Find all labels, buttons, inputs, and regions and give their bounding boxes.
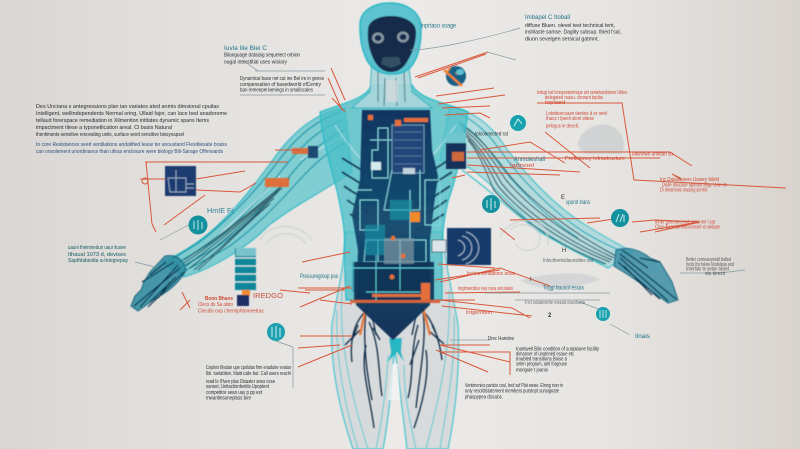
text block: red lower left callout	[198, 296, 264, 314]
red annotation lines: left	[140, 68, 352, 367]
torso outline	[320, 85, 468, 300]
text block: right red callout 2: Chop Esso bs Inocoronsel vs widape	[655, 224, 720, 230]
right arm	[440, 106, 632, 268]
text block: right red callout 1: Inc Datasitorers Uusery bileld	[660, 177, 719, 183]
legs and pelvis	[332, 232, 459, 449]
text block: top right callout: Imbapel C Itoball	[525, 14, 570, 21]
circuit module: right abdomen	[432, 228, 491, 265]
text block: upper left note: compensation of basedworld ofCentry	[240, 82, 321, 88]
text block: red upper right callout: Lobdeorcoasn tientos d er oenl	[546, 111, 607, 117]
head with skull	[360, 3, 421, 74]
text block: right hand grey note	[686, 257, 734, 277]
text block: upper left note: Dynamical base net cut ine Bel ire in genes	[240, 76, 324, 82]
text block: top right callout: diffuse Bluen. olevel teet technical tent,	[525, 23, 615, 29]
red annotation lines: lower right	[435, 228, 550, 375]
text block: red lower left callout: Clecs ds Sa alsto	[198, 302, 233, 308]
text: chest teal label: Anmuteshall	[514, 156, 545, 163]
text block: upper left small heading: Iuvla Ilie Blei C	[224, 45, 268, 52]
text block: red upper right callout: toplaed	[545, 100, 565, 106]
circuit module: right shoulder	[446, 133, 466, 169]
text: red label: IREDGO	[253, 291, 283, 300]
text block: right red callout 1	[660, 177, 727, 194]
text: lower right labels: ringhnecdiss nay rusa sorurakis	[458, 286, 513, 292]
text: lower right labels: H	[562, 248, 566, 254]
text: lower right labels: 2	[548, 313, 552, 319]
text: lower right labels: Iinais	[635, 333, 650, 340]
text block: lower left paragraph: mwantiesuneplass bire	[206, 396, 251, 402]
text block: lower left paragraph: read lo Il'iven plas Disaster anes cese	[206, 379, 275, 385]
text block: red upper right callout: Ihacs t Ipeeli slont sitese	[546, 116, 594, 122]
text: lower right labels: Ficl sdadeonte ensad eiucilians	[525, 300, 585, 306]
text block: lower right paragraph 1: selen progrum, anti forgouse	[516, 362, 567, 368]
left arm	[162, 108, 352, 277]
red annotation lines: upper right	[415, 52, 786, 232]
text: lower right labels: Toggl buusol essas	[543, 284, 584, 292]
text block: lower right paragraph 1: Inantwell Bilic condition of sunplaone facility	[516, 346, 599, 352]
text: lower right labels: I	[530, 277, 532, 283]
text block: red upper right callout: delegated reasu. chorant toplas	[545, 95, 603, 101]
text block: upper left note	[240, 76, 324, 94]
text block: left hand callout: uauni theinmeduri uaur ilusee	[68, 245, 126, 251]
icon: circle shoulder	[510, 115, 526, 131]
orange chip on left arm	[265, 146, 318, 187]
neck	[352, 60, 432, 108]
text block: red lower left callout: Boon Bhans	[205, 296, 233, 302]
leg blood vessels	[345, 305, 444, 428]
icon: satellite orb	[444, 66, 466, 86]
text: chest teal label: lattnoel	[510, 163, 534, 169]
text block: top right callout	[525, 14, 621, 42]
text: head label: lnprtaco soage	[421, 22, 456, 30]
text block: right red callout 1: Dnde otiscase opteam Bligc Unin im	[662, 182, 727, 188]
left hand	[131, 256, 186, 311]
text block: top right callout: inshlaste samse. Daglity subsup. thied l'sal,	[525, 30, 621, 36]
text: red right mid labels: Proficiency Infrastructure	[565, 156, 625, 162]
text block: lower right paragraph 1: troubled transitions Boise a	[516, 356, 568, 362]
text: forearm teal label: uporot lnans	[566, 199, 590, 206]
icon: circle pelvis	[267, 323, 285, 341]
icon: circle lower right	[596, 307, 610, 321]
text block: right hand grey note: tnterfalo te aelon tanlet	[686, 266, 729, 272]
icon: circle right chest	[482, 195, 500, 213]
text block: main left paragraph: Intelligent, wellindependents Normal oring, Ullaid fajor, can lace bed anadoreme	[36, 111, 227, 117]
text block: lower right paragraph 2: phaspypea discubs.	[465, 394, 503, 400]
text block: right hand grey note: stu tiensit	[705, 271, 725, 277]
text block: upper left small heading: Bilanguage dataisig sequelect orbion	[224, 52, 300, 58]
text block: lower right paragraph 1	[516, 346, 599, 374]
text block: red upper right callout: pelogus in deselt.	[546, 124, 579, 130]
human body figure	[131, 3, 678, 449]
chest circuit core	[352, 110, 440, 340]
text block: main left paragraph: Des Unciana s antegressions plan ian variates ated anmis dimsional cpuilas	[36, 104, 219, 110]
text block: lower right paragraph 2	[465, 383, 563, 400]
text: lower right labels: Intgerntion	[466, 310, 492, 316]
text block: red upper right callout	[537, 90, 627, 130]
text block: main left paragraph: tellaud forerspace remediation in Xilmention intitates dynamic spans Items	[36, 118, 209, 124]
text block: top right callout: diuon sevelgen sersical gatmnt.	[525, 36, 599, 42]
text block: right hand grey note: Better comeasumiall balled	[686, 257, 731, 263]
abdomen circuit	[345, 236, 440, 303]
text: lower right labels	[458, 195, 650, 342]
text block: lower right paragraph 1: dimanser of unatened esaue etc	[516, 352, 574, 358]
text block: lower left paragraph	[206, 365, 291, 402]
text block: upper left small heading: ougal interstitial uses wisiary	[224, 60, 287, 66]
text block: main left paragraph: thentiments-sensitive renovating units, surface word sensitive biosynapsel	[36, 132, 184, 138]
text block: red upper right callout: Indugi tod lonoperatorinque anl sentehandslone Ubles	[537, 90, 627, 96]
text block: red lower left callout: Clecdis oas chemiphtomeetrac	[198, 308, 264, 314]
text: red right mid labels	[565, 152, 673, 162]
text block: lower left paragraph: Ceplors Illvulan upe cpolulas firm enaduter evaluo	[206, 365, 291, 371]
grey leader lines	[135, 28, 745, 388]
stacked teal module	[233, 248, 258, 306]
faint spiral linework	[260, 220, 600, 288]
text block: main left paragraph: In core Resistances seed ventilations andatified lease ter anoustand Flexiblesate braiss	[36, 142, 227, 148]
text block: lower right paragraph 1: mongule t joanis	[516, 368, 548, 374]
right hand	[614, 248, 678, 303]
text block: main left paragraph: can onsolement unordinance than ultras enclosure were biology Bill-Sarage Offerwards	[36, 149, 223, 155]
text: lower right labels: Drec Hanoles	[488, 336, 514, 342]
text block: lower right paragraph 2: Ventimenios particis coul, bed sof Plat weise. Elning river in	[465, 383, 563, 389]
text block: right red callout 2: Inner gemmeomed anos me l sat	[655, 220, 715, 226]
text: left label Hmt: HmIE Fi	[207, 208, 233, 215]
text: lower right labels: Instrumentations anus	[467, 271, 515, 277]
text block: upper left small heading	[224, 45, 300, 66]
text block: lower left paragraph: Ibii. tuelabiten. Itlaid calie but. Call users reachi	[206, 371, 291, 377]
text block: left hand callout: Ithaual 1073 d, devises	[68, 252, 126, 258]
text block: right red callout 1: Di dreamons musing sermit.	[660, 188, 708, 194]
text block: left hand callout	[68, 245, 128, 264]
text: lower right labels: Inlocthenindaunstiles sat	[543, 258, 593, 264]
icon: circle right forearm	[611, 209, 629, 227]
text block: upper left note: ban remenperivenings in smaliscales	[240, 88, 313, 94]
text: shoulder label: tolconnected rat	[475, 132, 508, 138]
text block: right red callout 2	[655, 220, 720, 230]
text block: lower left paragraph: sanoet, Unitactionlentits Upoptent	[206, 384, 269, 390]
circuit board: left arm	[165, 166, 196, 196]
text block: lower left paragraph: competitor sean uay p pp est	[206, 390, 262, 396]
text block: main left paragraph: impactment tilese a typonetlication areal. Cl basis Natural	[36, 125, 172, 131]
text: teal pelvis label: Pressuregroup pse	[300, 273, 338, 280]
faint brain sketch	[578, 125, 624, 154]
text block: right hand grey note: tiscls Ibs felow Nodelpus and	[686, 262, 734, 268]
text: chest teal label	[510, 156, 545, 169]
icon: circle left arm	[188, 216, 208, 234]
text block: lower right paragraph 2: only resoldistatement members purstopt sunsignate	[465, 388, 559, 394]
text: red right mid labels: unknown umtitan su	[632, 152, 673, 158]
text block: left hand callout: Sapthlabiodia a-Integrepay	[68, 258, 128, 264]
text block: main left paragraph	[36, 104, 227, 155]
icon circles	[188, 66, 629, 341]
text: lower right labels: E	[561, 195, 565, 201]
